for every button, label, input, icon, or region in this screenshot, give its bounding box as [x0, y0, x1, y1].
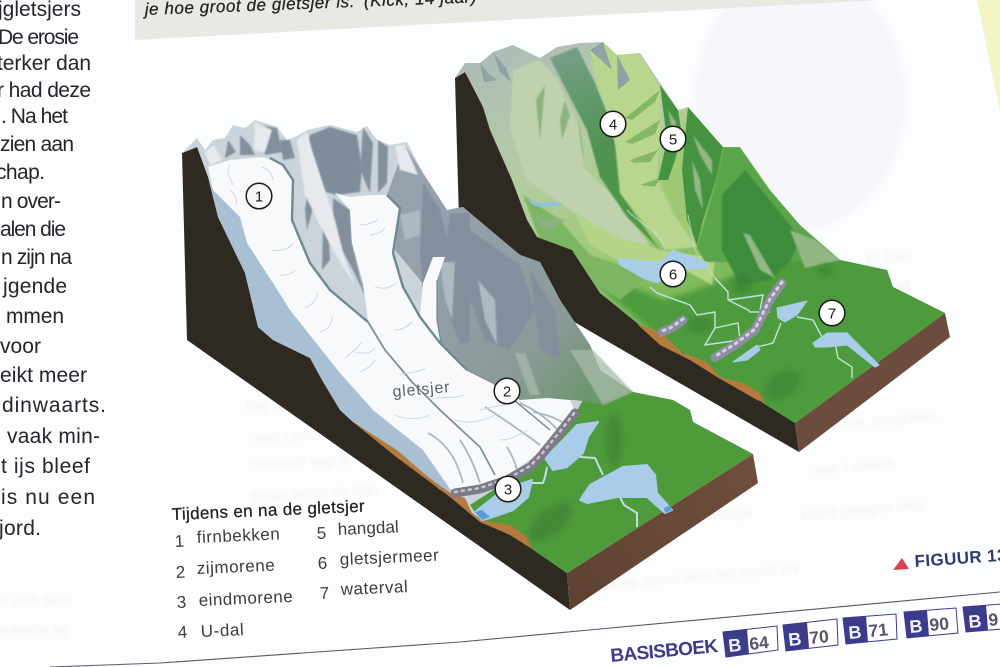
left text column: jord.: [0, 517, 41, 540]
badge B 70: B: [787, 629, 802, 650]
legend title: Tijdens en na de gletsjer: [171, 497, 365, 524]
left text column: [0, 0, 106, 540]
left text column: jgende: [2, 275, 67, 298]
end moraine: [455, 413, 575, 493]
badge B 90: B: [909, 616, 923, 637]
badge B 70: 70: [808, 626, 830, 648]
dark profile cover and terrain surface: [182, 120, 753, 573]
ridge of hanging valley left: [658, 85, 682, 180]
legend item 4: U-dal: [200, 620, 244, 641]
green meadow shadow patches: [686, 264, 833, 406]
basisboek references: [610, 604, 1000, 667]
show-through text from the reverse page: In Zwit-: [865, 247, 915, 267]
marker 4: 4: [609, 116, 617, 134]
marker 5: [660, 126, 686, 152]
mid-slope green streaks: [530, 85, 585, 232]
badge B 71: B: [848, 622, 862, 643]
pale gap between ridges: [660, 108, 696, 245]
pale grey-green left slope: [510, 60, 650, 245]
terrain surface: [456, 42, 945, 423]
pale U-valley floor: [590, 42, 697, 250]
badge B 64: B: [727, 635, 742, 656]
show-through text from the reverse page: Die vraag naar de: [245, 393, 365, 416]
legend item 5: [316, 517, 399, 543]
left text column: is nu een: [1, 486, 95, 509]
marker 6: 6: [669, 266, 677, 284]
left text column: De erosie: [0, 26, 79, 49]
terminal moraine ridges: [662, 283, 782, 358]
blue ice side band: [208, 172, 452, 492]
orange soil strip: [637, 324, 765, 403]
show-through text from the reverse page: harde steen stort het water na: [599, 560, 800, 594]
show-through text from the reverse page: slukkerlot, zat' betuigd: [604, 504, 753, 531]
light rock stripes: [205, 122, 418, 285]
badge B 90: [904, 608, 958, 638]
diagram: landscape during the glacier: [182, 120, 758, 610]
left text column: dinwaarts.: [2, 394, 106, 417]
left side face: [455, 72, 799, 452]
legend item 1: firnbekken: [196, 524, 280, 547]
badge B 64: 64: [748, 632, 770, 654]
badge B 64: [723, 626, 778, 657]
marker 5: 5: [669, 132, 677, 148]
legend item 6: gletsjermeer: [339, 546, 439, 569]
left text column: voor: [0, 335, 41, 358]
label: gletsjer: gletsjer: [392, 379, 451, 401]
left text column: alen die: [0, 218, 66, 241]
faint shape showing through the paper: [694, 0, 906, 230]
left side face: [182, 147, 570, 610]
moraine highlights: [662, 282, 782, 357]
lake behind moraine 6: [618, 250, 708, 283]
quote band: [135, 0, 880, 40]
upper grey peaks: [480, 42, 630, 90]
right side face: [567, 454, 758, 610]
legend item 6: 6: [317, 554, 328, 573]
show-through text from the reverse page: reisje langs de Rijn: [251, 481, 379, 505]
badge B 9x cropped: [963, 604, 1000, 632]
show-through text from the reverse page: [0, 247, 938, 639]
ridge of hanging valley right: [682, 107, 723, 245]
glacier lake at end moraine: [475, 480, 532, 520]
pale valley floor: [575, 215, 715, 285]
right dark slope: [722, 170, 800, 285]
legend item 1: [174, 524, 280, 551]
marker 7: 7: [828, 306, 836, 322]
valley ribs: [625, 90, 660, 187]
legend item 1: 1: [174, 532, 185, 551]
middle lake: [545, 422, 598, 470]
left text column: n over-: [1, 190, 61, 213]
legend item 7: waterval: [339, 577, 408, 599]
show-through text from the reverse page: tattaB: [871, 277, 911, 296]
marker 6: [660, 261, 686, 287]
white glacier ice: [208, 157, 575, 493]
grey rock stripes: [225, 125, 560, 360]
diagram: landscape after the glacier: [455, 42, 950, 452]
legend item 5: hangdal: [337, 517, 399, 539]
badge B 90: 90: [929, 613, 950, 635]
hanging glacier tongue: [420, 257, 445, 343]
show-through text from the reverse page: 'Vooruit!' riep ik: [249, 452, 351, 474]
marker 2: 2: [503, 384, 511, 400]
lateral moraine lines: [270, 158, 467, 370]
medial moraines: [368, 322, 550, 475]
yellow sheet behind the page corner: [977, 0, 1000, 112]
left text column: vaak min-: [7, 425, 100, 448]
ice flow streaks: [428, 403, 566, 483]
legend item 2: 2: [175, 563, 186, 582]
deep blue lake outlet: [475, 510, 490, 520]
marker 7: [819, 300, 845, 326]
grey rock: central dark mass: [306, 127, 362, 195]
left text column: eikt meer: [0, 364, 87, 387]
badge B 71: 71: [868, 619, 889, 641]
legend item 4: 4: [177, 623, 188, 642]
marker 3: [495, 476, 521, 502]
show-through text from the reverse page: Noordzee, langzaam: [799, 407, 938, 436]
lower-left green bands: [523, 195, 650, 300]
figure reference: [893, 546, 1000, 571]
dark land shading: [522, 414, 622, 548]
marker 2: [494, 378, 520, 404]
right side face: [795, 313, 950, 452]
orange soil strip: [353, 422, 532, 549]
show-through text from the reverse page: naar Londen: [809, 455, 894, 479]
legend item 6: [317, 546, 439, 573]
badge B 71: [843, 614, 897, 644]
dark U-valley ridge: [550, 47, 660, 250]
show-through text from the reverse page: edeelte bij: [0, 622, 68, 639]
pale lower-slope streaks: [515, 350, 633, 405]
legend item 3: 3: [176, 593, 187, 612]
legend item 7: 7: [319, 584, 330, 603]
show-through text from the reverse page: naar Londen: [249, 426, 334, 447]
green valley floor: [470, 370, 753, 573]
lower lake: [580, 465, 672, 513]
pale flank streaks: [400, 210, 497, 345]
meltwater streams: [627, 210, 852, 378]
legend item 5: 5: [316, 524, 327, 543]
badge B 70: [783, 619, 838, 651]
left text column: mmen: [6, 305, 64, 328]
marker 1: 1: [255, 188, 263, 206]
legend item 2: zijmorene: [196, 556, 275, 578]
valley floor meadow: [589, 246, 945, 423]
legend item 3: eindmorene: [198, 587, 293, 610]
badge B 9x cropped: 9: [988, 609, 999, 630]
left text column: t ijs bleef: [1, 455, 90, 478]
legend item 7: [319, 577, 408, 603]
right bright slope: [697, 147, 840, 270]
crevasse marks: [228, 165, 528, 440]
right mountain flank: [387, 145, 633, 405]
left text column: zien aan: [0, 133, 74, 156]
small lakes: [733, 301, 879, 367]
small upper lake: [528, 200, 562, 207]
basisboek label: BASISBOEK: [610, 636, 719, 667]
left text column: . Na het: [1, 105, 68, 128]
legend item 2: [175, 556, 275, 582]
deep blue lower-lake outlet: [664, 505, 672, 513]
left text column: n zijn na: [1, 246, 72, 269]
show-through text from the reverse page: n zich door: [0, 592, 73, 609]
footer rule: [50, 592, 1000, 667]
meltwater streams: [532, 457, 637, 527]
moraine highlights: [455, 412, 575, 492]
pale streaks on ridge: [668, 110, 840, 278]
badge B 9x cropped: B: [968, 611, 982, 632]
show-through text from the reverse page: zacht gelegen weg: [799, 496, 925, 524]
marker 4: [600, 111, 626, 137]
base slope colour: [450, 40, 960, 430]
legend: [171, 497, 439, 642]
marker 3: 3: [504, 482, 512, 498]
red triangle: [893, 558, 909, 570]
number markers: [246, 111, 845, 502]
marker 1: [246, 183, 272, 209]
legend item 4: [177, 620, 244, 642]
